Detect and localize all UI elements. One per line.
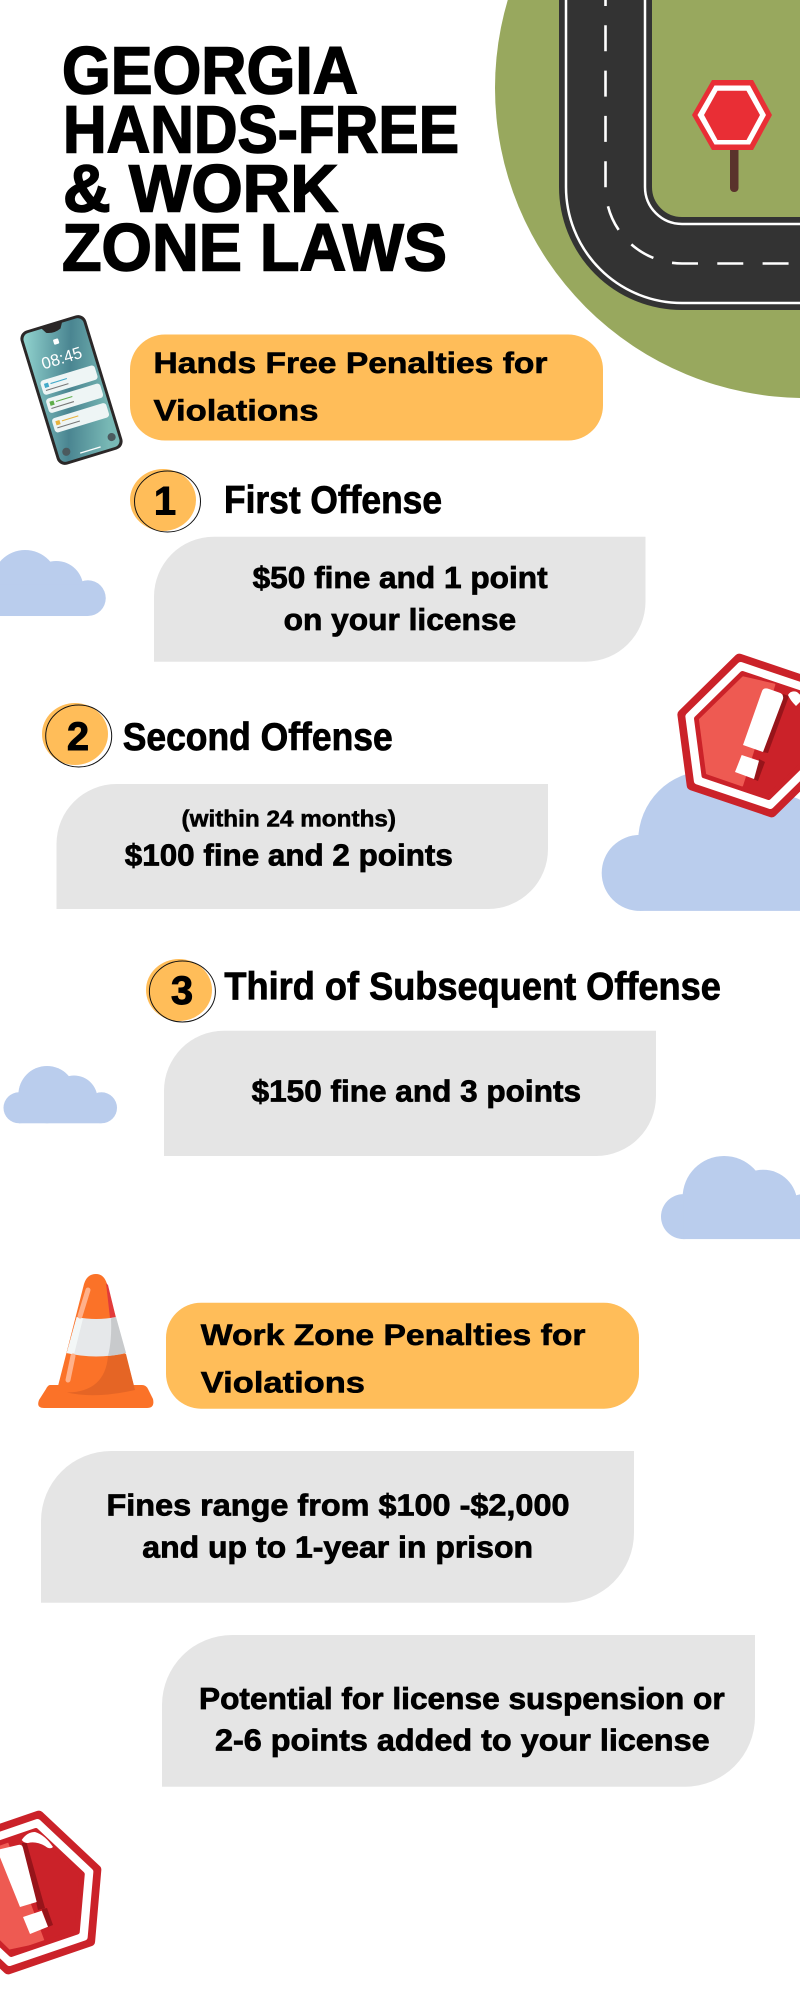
card: first offense penalty: on your license bbox=[284, 602, 516, 637]
exclamation mark bbox=[0, 1832, 53, 1934]
title bbox=[62, 34, 459, 286]
card: license suspension bbox=[162, 1635, 755, 1787]
heading: third offense: Third of Subsequent Offense bbox=[224, 966, 721, 1008]
icon: smartphone bbox=[18, 313, 125, 467]
light half of sign bbox=[0, 1842, 44, 1950]
cloud: lower right bbox=[661, 1156, 800, 1239]
icon: warning sign right bbox=[682, 659, 800, 812]
icon: warning sign bottom left bbox=[0, 1816, 96, 1969]
number badge 3: 3 bbox=[171, 969, 193, 1013]
section header: hands free penalties bbox=[130, 334, 603, 440]
card: second offense penalty: $100 fine and 2 points bbox=[125, 838, 453, 873]
number badge 2 bbox=[42, 703, 112, 767]
section header: work zone penalties bbox=[166, 1303, 639, 1409]
section header: work zone penalties: Work Zone Penalties for bbox=[201, 1319, 586, 1352]
sign hexagon bbox=[0, 1816, 96, 1969]
title: & WORK bbox=[63, 152, 338, 226]
card: second offense penalty bbox=[56, 784, 548, 909]
green circle scene bbox=[495, 0, 800, 398]
icon: stop sign bbox=[692, 80, 772, 192]
section header: hands free penalties: Violations bbox=[154, 394, 318, 428]
card: third offense penalty bbox=[164, 1031, 656, 1156]
section header: work zone penalties: Violations bbox=[201, 1366, 365, 1399]
section header: hands free penalties: Hands Free Penalties for bbox=[154, 347, 548, 380]
exclamation mark bbox=[735, 688, 800, 781]
title: HANDS-FREE bbox=[63, 92, 459, 168]
number badge 3 bbox=[146, 959, 215, 1022]
number badge 2: 2 bbox=[67, 715, 89, 759]
card: fines range: Fines range from $100 -$2,000 bbox=[106, 1488, 570, 1523]
title: ZONE LAWS bbox=[62, 210, 447, 286]
card: first offense penalty bbox=[154, 537, 646, 662]
cloud: middle left bbox=[4, 1066, 117, 1123]
card: first offense penalty: $50 fine and 1 point bbox=[253, 560, 548, 595]
number badge 1: 1 bbox=[154, 480, 176, 524]
cloud: large right bbox=[602, 770, 800, 911]
title: GEORGIA bbox=[62, 34, 358, 108]
card: license suspension: 2-6 points added to your license bbox=[215, 1723, 710, 1758]
card: license suspension: Potential for license suspension or bbox=[199, 1681, 725, 1716]
road bbox=[606, 0, 800, 264]
heading: first offense: First Offense bbox=[224, 479, 442, 522]
card: second offense penalty: (within 24 months) bbox=[182, 806, 396, 832]
card: third offense penalty: $150 fine and 3 points bbox=[252, 1074, 581, 1109]
icon: traffic cone bbox=[38, 1274, 153, 1408]
icon: smartphone: 08:45 bbox=[39, 343, 84, 373]
sign hexagon bbox=[682, 659, 800, 812]
card: fines range bbox=[41, 1451, 634, 1603]
heading: second offense: Second Offense bbox=[123, 716, 393, 759]
green grass circle bbox=[495, 0, 800, 398]
card: fines range: and up to 1-year in prison bbox=[142, 1530, 533, 1565]
cloud: upper left bbox=[0, 550, 106, 616]
number badge 1 bbox=[130, 469, 200, 532]
